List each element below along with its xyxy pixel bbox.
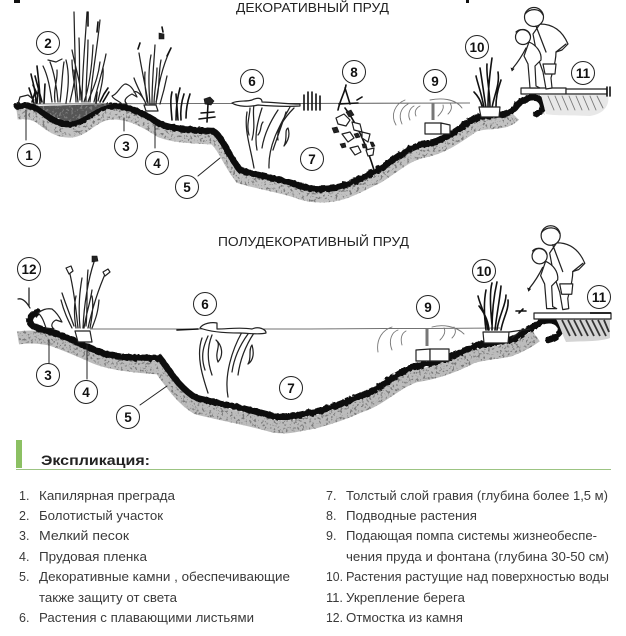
callout 1 [18,144,40,166]
legend heading accent bar [16,440,22,468]
legend: right column: 12. [326,611,343,625]
callout 11 [588,286,610,308]
legend: left column: 2. [19,509,29,523]
bank hatch lines [562,320,609,336]
diagram: decorative pond [17,8,610,198]
legend: right column: Укрепление берега [346,591,465,605]
callout 2 [36,32,60,54]
callout 11 [572,62,594,84]
legend: right column: 7. [326,489,336,503]
leader lines [26,110,220,176]
legend: right column: 11. [326,591,343,605]
fountain pump [393,99,462,134]
legend: left column: 6. [19,611,29,625]
stone edging [18,288,62,329]
legend: right column: Толстый слой гравия (глубина более 1,5 м) [346,489,608,503]
legend: left column: Мелкий песок [39,529,130,543]
diagram: semi-decorative pond [18,226,611,428]
water surface line [90,328,500,329]
bank hatching and gravel [556,319,610,342]
potted marginal plant [474,58,501,117]
callout 7: 7 [308,152,316,167]
timber deck [521,87,610,96]
corner marks [14,0,469,3]
title: semi-decorative pond: ПОЛУДЕКОРАТИВНЫЙ ПРУД [218,234,410,249]
iris plant [134,27,171,111]
small water plants [171,88,215,122]
potted marginal plant [478,282,530,343]
legend: left column: Растения с плавающими листьями [39,611,254,625]
water surface line [17,103,470,104]
pond liner [30,312,561,417]
legend: right column: Растения растущие над поверхностью воды [346,570,609,584]
legend: left column: 1. [19,489,29,503]
callout 6 [194,292,216,316]
legend: right column: 9. [326,529,336,543]
legend: left column: 4. [19,550,29,564]
pond liner [17,97,543,189]
callout 7 [300,148,324,170]
legend heading: Экспликация: [41,453,150,468]
gravel layer [18,336,536,427]
callout 5: 5 [183,180,191,195]
legend: right column: 10. [326,570,343,584]
callout 11: 11 [576,66,591,81]
legend: left column: Капилярная преграда [39,489,175,503]
legend: right column: Подающая помпа системы жизнеобеспе- [346,529,597,543]
callout 7 [280,376,302,400]
marginal reeds [304,92,320,110]
callout 3 [114,134,138,158]
callout 9: 9 [431,74,439,89]
cattails [72,12,106,102]
legend: left column [19,489,290,625]
legend: right column: Подводные растения [346,509,477,523]
callout 3: 3 [44,368,52,383]
callout 6: 6 [248,74,256,89]
callout 10: 10 [476,264,492,279]
legend: left column: 3. [19,529,29,543]
callout 6: 6 [201,297,209,312]
legend: right column: Отмостка из камня [346,611,463,625]
callout 4: 4 [82,385,90,400]
callout 11: 11 [592,290,607,305]
callout 6 [240,70,264,92]
gravel layer [17,114,515,197]
legend: right column: 8. [326,509,336,523]
timber deck [534,313,611,319]
callout 9 [416,296,440,318]
rocks [112,84,137,104]
fountain pump [378,326,464,361]
callout 10 [466,36,488,58]
left stones at water [18,95,34,104]
submerged plants [332,85,375,170]
legend: left column: 5. [19,570,29,584]
callout 12 [18,258,40,280]
leader lines [49,340,167,405]
callout 3 [36,364,60,386]
callout 9 [424,70,446,92]
legend: right column: чения пруда и фонтана (глубина 30-50 см) [346,550,609,564]
callout 4: 4 [153,156,161,171]
legend heading rule [16,469,611,470]
legend: left column: Декоративные камни , обеспечивающие [39,570,290,584]
legend: left column: также защиту от света [39,591,177,605]
callout 7: 7 [287,381,295,396]
callout 5 [116,406,140,428]
callout 4 [146,152,168,174]
floating leaf plant [232,98,300,168]
children [528,226,585,310]
callout 3: 3 [122,139,130,154]
callout 2: 2 [44,36,52,51]
legend: left column: Прудовая пленка [39,550,147,564]
marsh plants [29,59,109,103]
legend: left column: Болотистый участок [39,509,164,523]
callout 1: 1 [25,148,33,163]
callout 4 [74,380,98,404]
callout 8 [342,60,366,84]
floating leaf plant [177,323,266,397]
callout 8: 8 [350,65,358,80]
children [511,8,568,89]
title: decorative pond: ДЕКОРАТИВНЫЙ ПРУД [236,0,390,15]
callout 10 [472,260,496,282]
legend: right column [326,489,609,625]
iris plant [61,256,110,342]
bank hatching [548,96,603,110]
callout 10: 10 [469,40,485,55]
callout 12: 12 [21,262,37,277]
callout 5: 5 [124,410,132,425]
callout 5 [176,176,198,198]
bank hatch and gravel [541,95,608,116]
callout 9: 9 [424,300,432,315]
swamp soil [38,104,112,121]
